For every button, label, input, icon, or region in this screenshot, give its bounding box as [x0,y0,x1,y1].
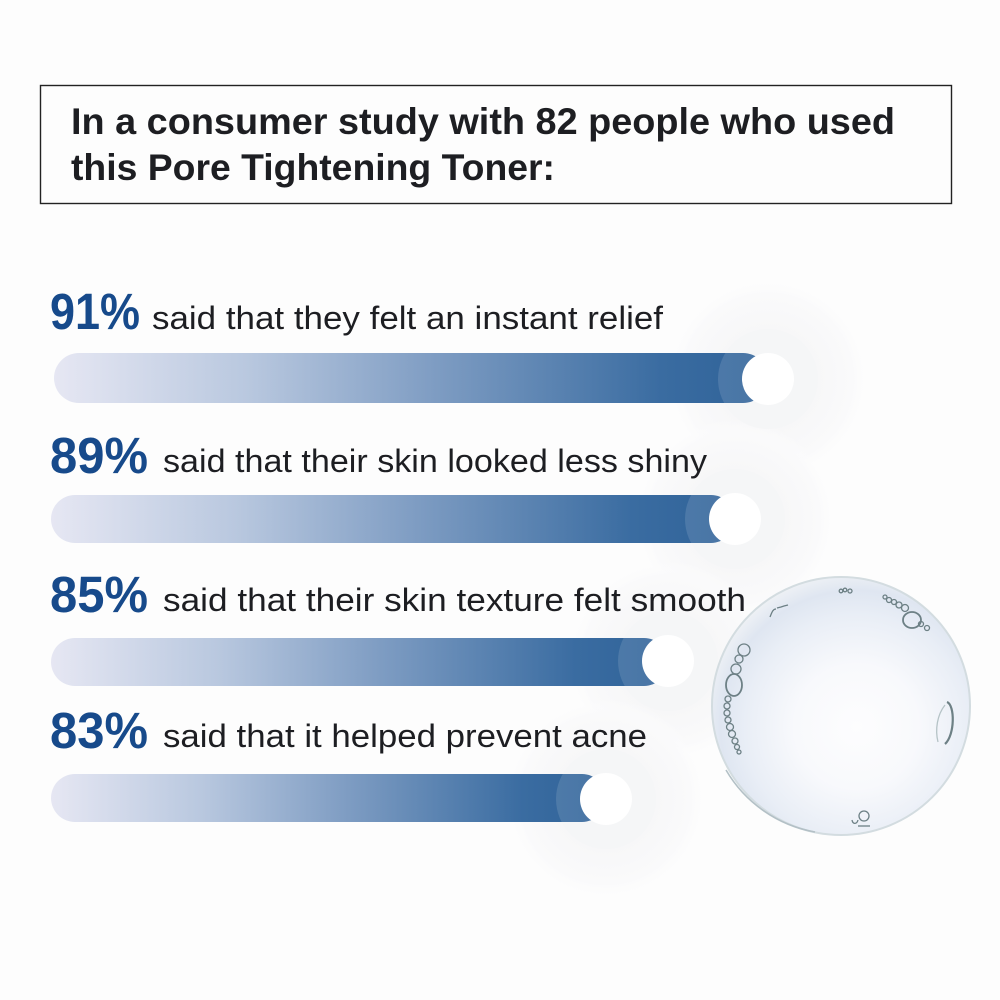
progress bar [51,611,718,711]
stat row: 83% prevent acne [50,702,656,849]
stat label: said that it helped prevent acne [163,718,647,754]
stat row: 89% less shiny [50,427,785,569]
progress bar [54,329,818,429]
stat label: said that their skin looked less shiny [163,443,707,479]
stat value: 89% [50,427,148,484]
heading line 1: In a consumer study with 82 people who used [71,101,895,142]
panel: study heading box [40,86,952,204]
stat label: said that their skin texture felt smooth [163,582,746,618]
stat value: 85% [50,566,148,623]
progress bar [51,749,656,849]
stat value: 83% [50,702,148,759]
icon: toner droplet lens with bubbles [712,577,970,835]
stat label: said that they felt an instant relief [152,300,663,336]
stat row: 91% instant relief [50,283,818,429]
soft halos behind sliders [506,279,868,899]
stat row: 85% smooth texture [50,566,746,711]
stat value: 91% [50,283,140,340]
progress bar [51,469,785,569]
heading line 2: this Pore Tightening Toner: [71,147,555,188]
